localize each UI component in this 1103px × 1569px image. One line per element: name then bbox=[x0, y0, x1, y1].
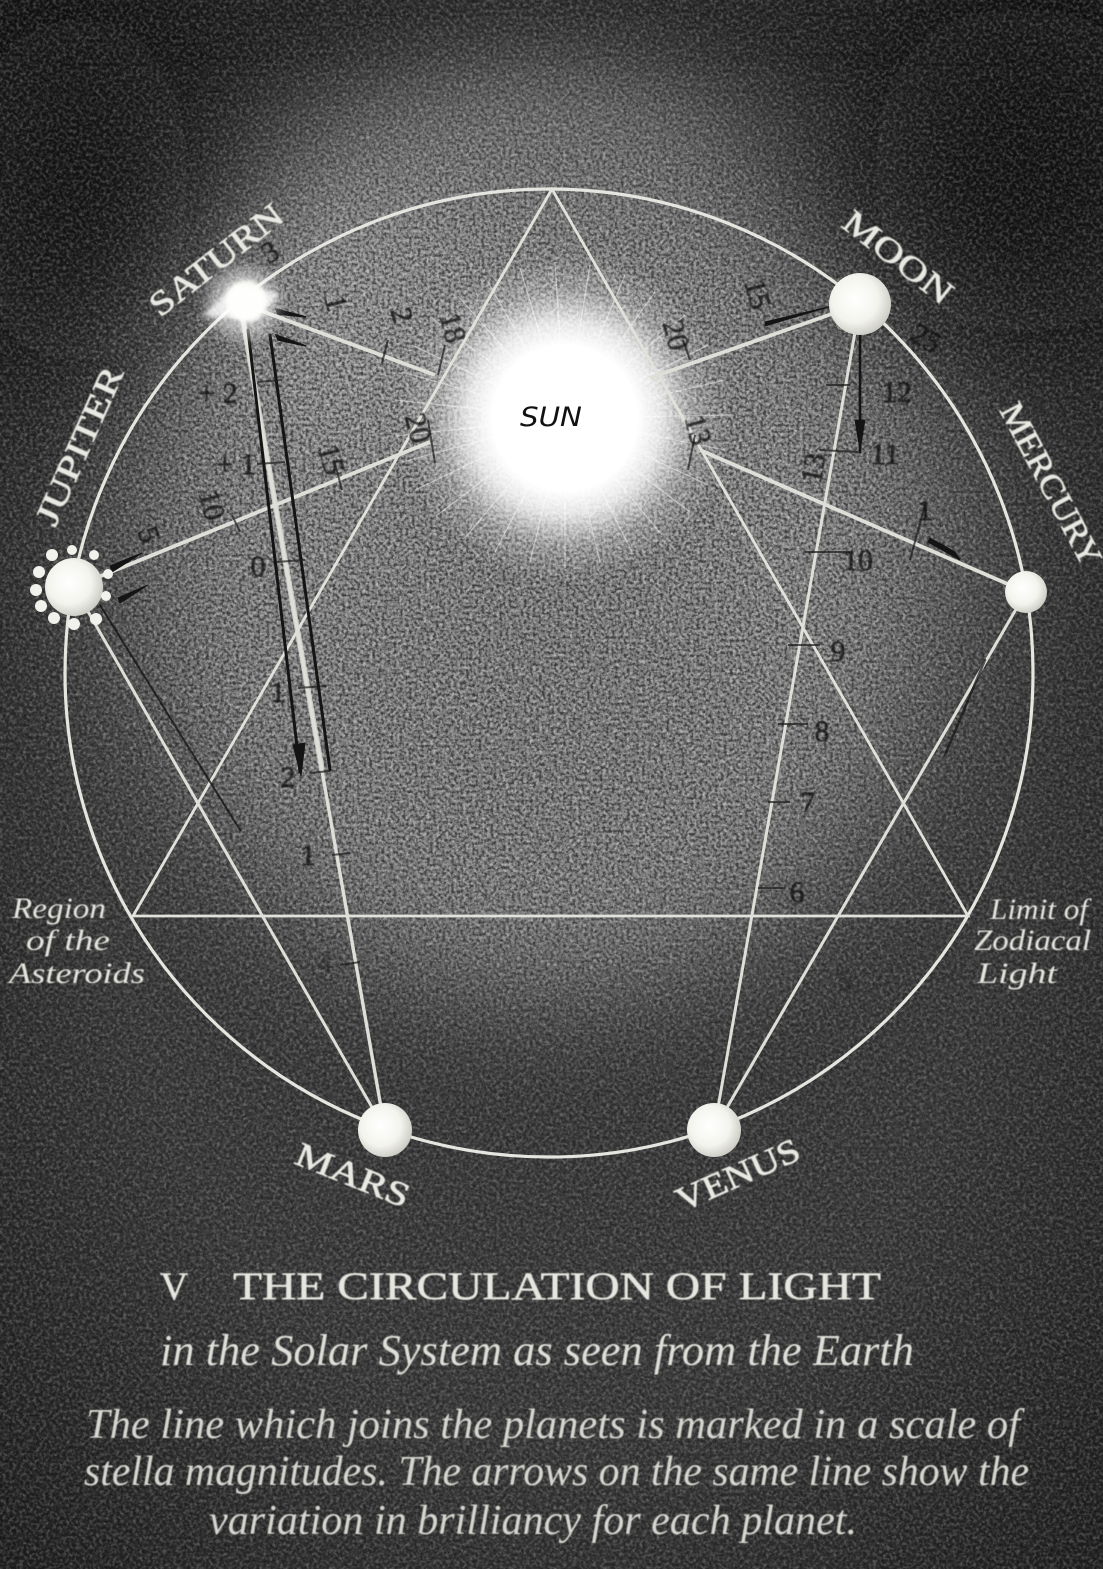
scale numbers: 18 bbox=[433, 309, 472, 347]
planet labels: JUPITER bbox=[29, 361, 132, 531]
scale numbers: 12 bbox=[882, 376, 912, 409]
scale numbers: 4 bbox=[318, 946, 332, 979]
scale numbers: 15 bbox=[312, 441, 351, 478]
scale numbers: 11 bbox=[871, 438, 899, 471]
planet: Saturn with ring bbox=[202, 267, 280, 339]
scale ticks bbox=[232, 340, 925, 965]
label: limit of zodiacal light: Zodiacal bbox=[974, 924, 1091, 957]
scale numbers: + 1 bbox=[216, 448, 256, 481]
orbit circle bbox=[65, 189, 1033, 1157]
scale numbers: + 2 bbox=[198, 377, 238, 410]
planet labels: VENUS bbox=[670, 1132, 806, 1219]
triangle of zodiacal light bbox=[133, 189, 968, 916]
planet labels: SATURN bbox=[142, 197, 291, 324]
description: variation in brilliancy for each planet. bbox=[209, 1498, 857, 1544]
scale numbers: 8 bbox=[814, 715, 830, 748]
scale numbers: 0 bbox=[250, 550, 266, 583]
scale numbers: 3 bbox=[256, 234, 285, 270]
planet labels: MOON bbox=[835, 203, 960, 312]
sun label bbox=[515, 394, 591, 436]
scale numbers bbox=[130, 234, 947, 997]
planet: Jupiter with moons bbox=[30, 545, 113, 630]
scale numbers: 10 bbox=[192, 486, 231, 524]
scale numbers: 6 bbox=[790, 876, 804, 909]
planet labels: MERCURY bbox=[992, 396, 1103, 573]
label: limit of zodiacal light: Limit of bbox=[989, 893, 1092, 926]
label: region of the asteroids: of the bbox=[26, 924, 110, 957]
planetary lines to the sun bbox=[74, 303, 1026, 592]
label: region of the asteroids: Asteroids bbox=[7, 957, 145, 990]
scale numbers: 20 bbox=[398, 409, 437, 447]
title: V bbox=[160, 1265, 188, 1308]
label: limit of zodiacal light: Light bbox=[976, 957, 1058, 990]
scale numbers: 5 bbox=[838, 964, 852, 997]
label: region of the asteroids bbox=[7, 892, 145, 990]
scale numbers: 10 bbox=[843, 544, 873, 577]
scale numbers: 7 bbox=[800, 786, 816, 819]
scale numbers: 2 bbox=[280, 761, 296, 794]
subtitle: in the Solar System as seen from the Earth bbox=[160, 1326, 914, 1375]
scale numbers: 1 bbox=[318, 291, 353, 314]
scale numbers: 1 bbox=[918, 494, 932, 527]
scale numbers: 15 bbox=[738, 276, 777, 313]
scale numbers: 2 bbox=[384, 304, 419, 327]
description: stella magnitudes. The arrows on the same line show the bbox=[84, 1449, 1029, 1495]
label: limit of zodiacal light bbox=[974, 893, 1092, 990]
label: region of the asteroids: Region bbox=[11, 892, 106, 925]
scale numbers: 9 bbox=[830, 635, 846, 668]
planet: Venus bbox=[687, 1103, 741, 1157]
scale numbers: 13 bbox=[795, 450, 832, 486]
scale numbers: 1 bbox=[270, 676, 286, 709]
sun label: SUN bbox=[520, 402, 582, 433]
scale numbers: 13 bbox=[678, 411, 717, 449]
planet: Mercury bbox=[1005, 571, 1047, 613]
scale numbers: 20 bbox=[656, 316, 695, 354]
scale numbers: 1 bbox=[300, 839, 316, 872]
planet labels: MARS bbox=[290, 1136, 415, 1215]
scale numbers: 25 bbox=[905, 317, 947, 360]
scale numbers: 5 bbox=[130, 522, 167, 548]
planet: Mars bbox=[358, 1103, 412, 1157]
planet: Moon bbox=[829, 273, 891, 335]
description: The line which joins the planets is marked in a scale of bbox=[86, 1402, 1025, 1448]
variation arrows bbox=[100, 306, 985, 830]
planet labels bbox=[29, 197, 1103, 1219]
magnitude scale lines bbox=[74, 303, 1026, 1130]
sun with rays bbox=[395, 253, 730, 583]
description bbox=[84, 1402, 1029, 1544]
title: THE CIRCULATION OF LIGHT bbox=[233, 1265, 881, 1308]
